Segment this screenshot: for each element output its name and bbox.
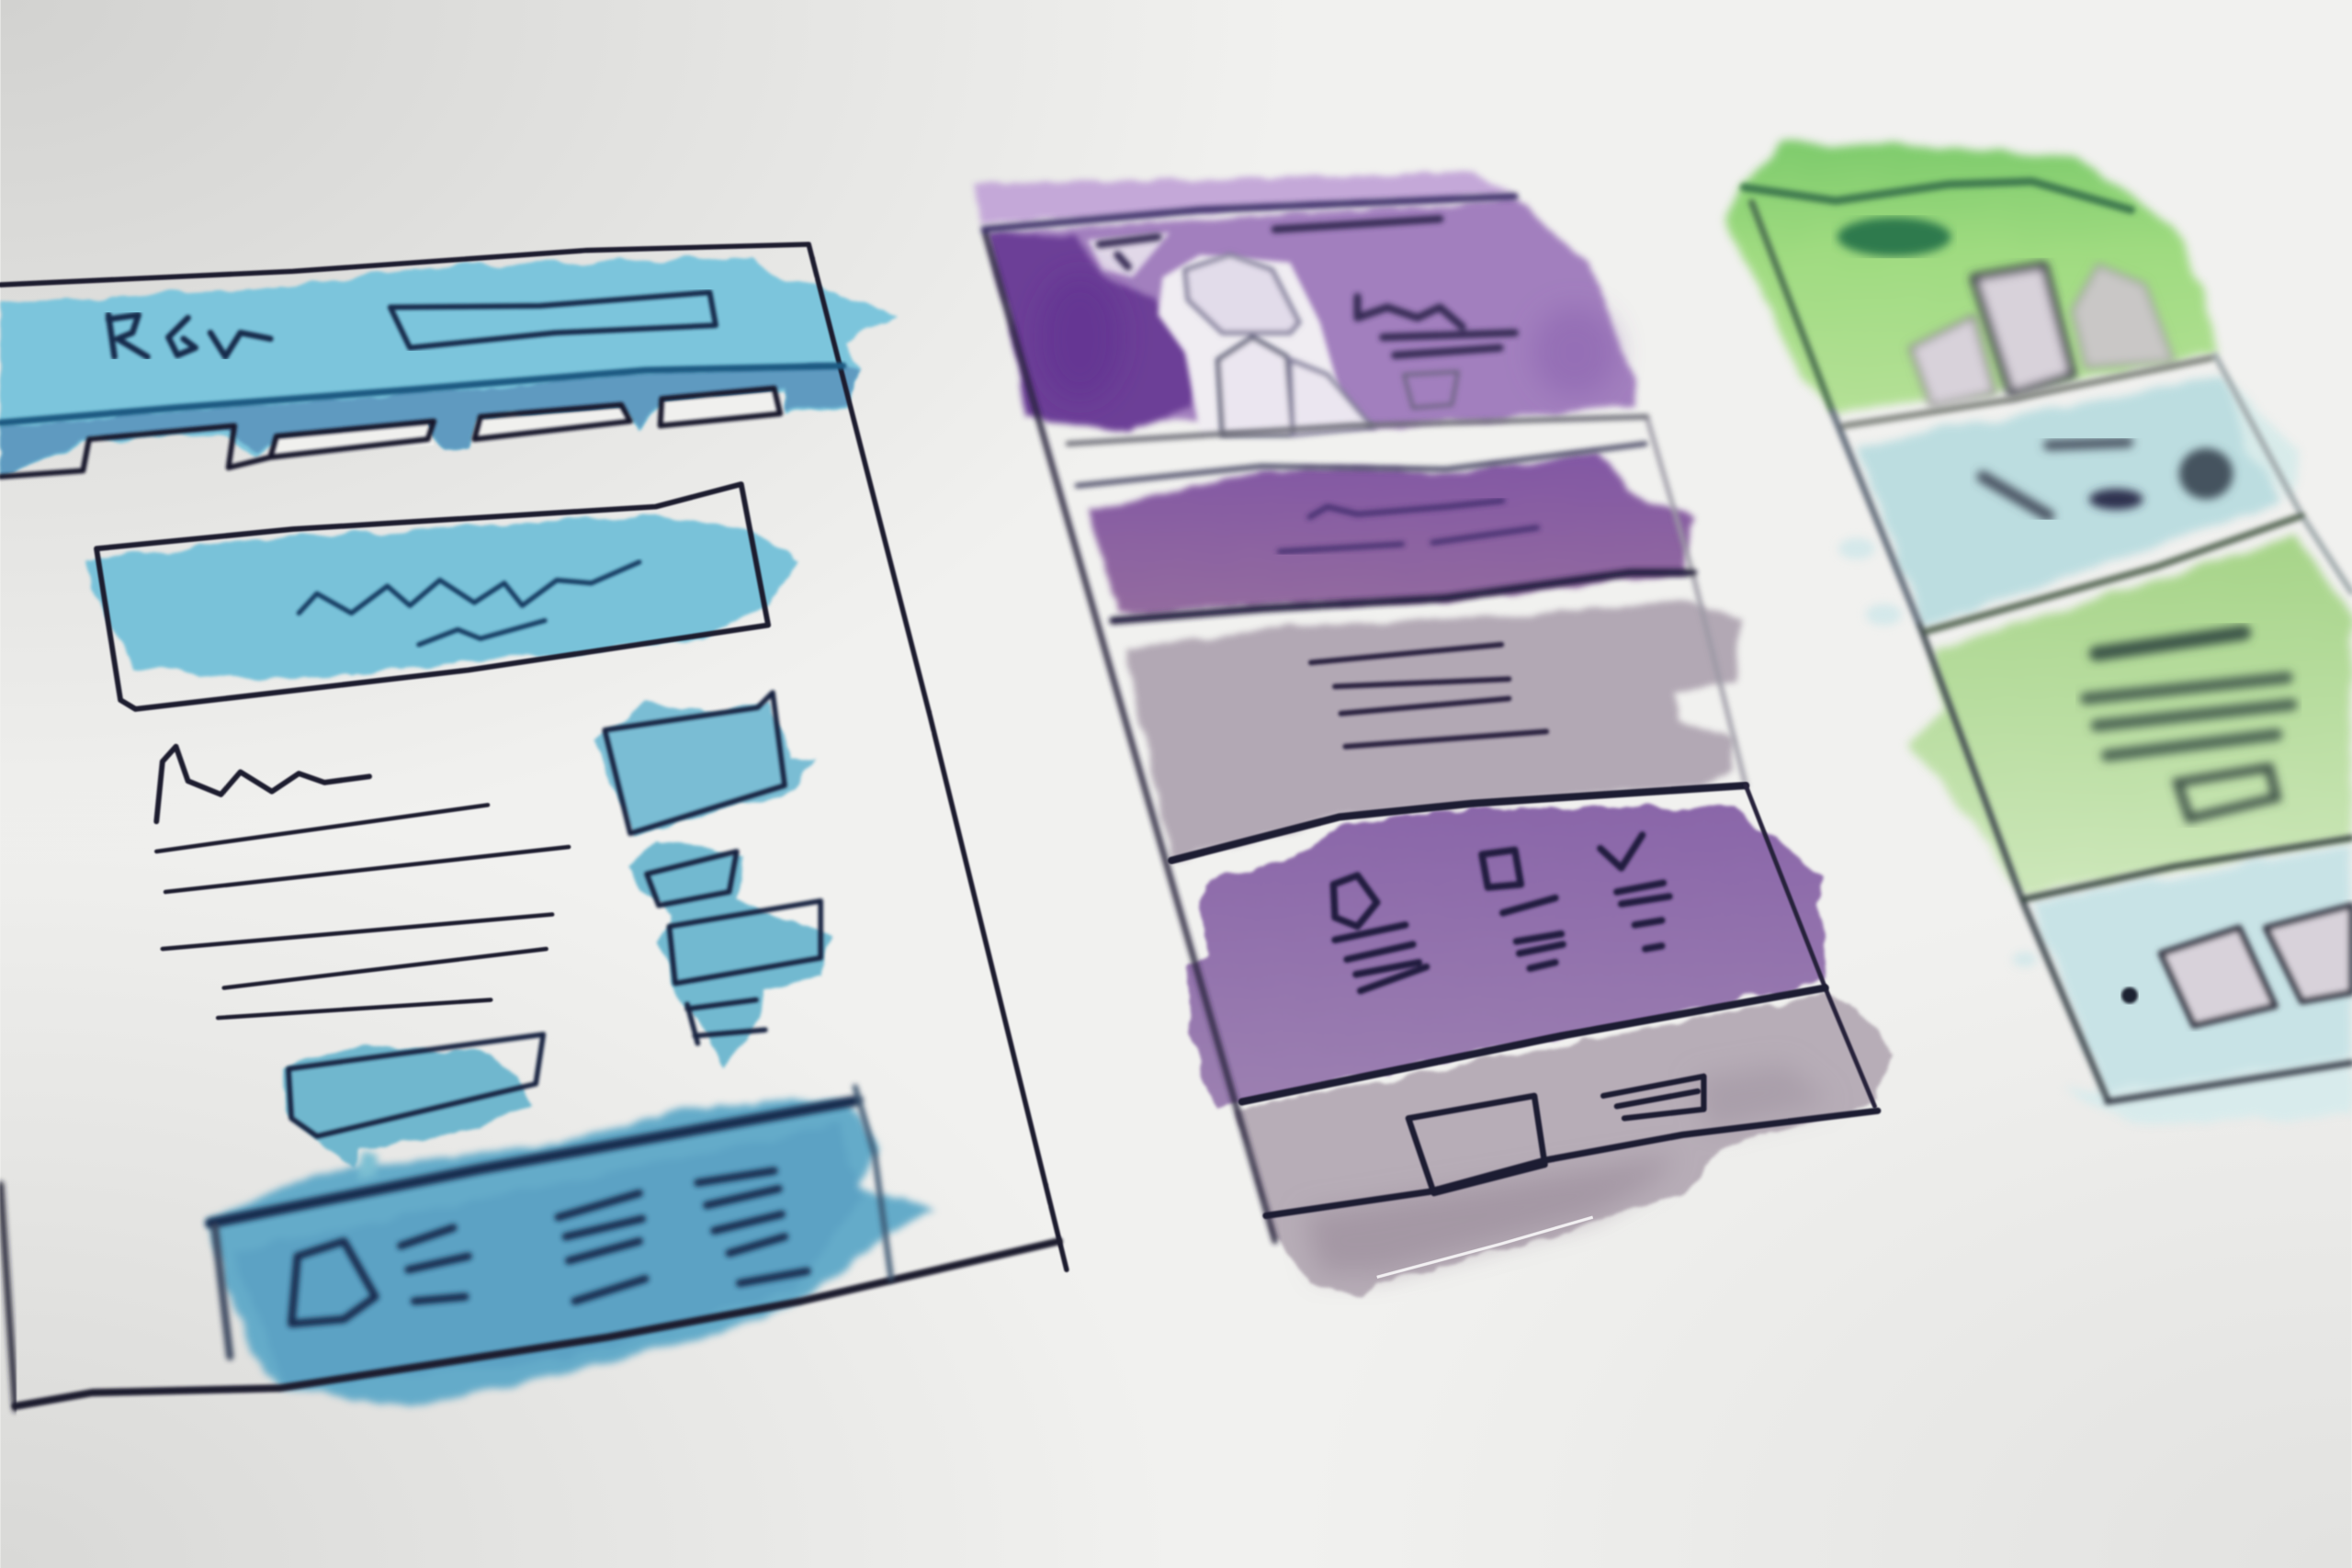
logo scribble	[108, 315, 270, 356]
panel: purple mobile wireframe	[974, 173, 1893, 1298]
text lines	[156, 805, 569, 1018]
washes: green and pale blue paint	[1728, 142, 2351, 1122]
outline: phone frame and sections	[1745, 181, 2351, 1101]
panel: blue desktop wireframe	[1, 244, 1067, 1409]
wash: darker purple corner shadow	[1038, 275, 1617, 400]
divider above lower purple	[1171, 785, 1746, 861]
hero squiggle	[299, 562, 639, 645]
washes: header and content blue paint	[1, 258, 897, 1169]
button	[288, 1034, 543, 1136]
green section text	[2086, 633, 2291, 818]
person illustration in hero	[1185, 254, 1373, 434]
grey section text lines	[1311, 645, 1546, 747]
footer dot	[2121, 987, 2138, 1004]
panel: green mobile wireframe	[1728, 142, 2351, 1122]
three column icons and lines	[1333, 835, 1669, 991]
upper frame and dividers	[984, 197, 1746, 1241]
pale dry-brush mark in footer wash	[1377, 1217, 1593, 1277]
white paper halo around person	[1088, 232, 1350, 434]
skyline illustration	[1911, 265, 2173, 406]
wash: blurred blue footer paint	[208, 1100, 936, 1406]
wash: grey footer shadow tone	[1305, 1065, 1830, 1274]
wash: darker blue nav band below header line	[1, 365, 861, 477]
footer thumbnails	[2161, 906, 2351, 1025]
outline: browser frame	[1, 244, 1067, 1409]
navigation bar lines	[1, 366, 843, 477]
hero header scribbles	[1100, 219, 1515, 408]
right lower frame	[1746, 785, 1874, 1106]
text heading scribble	[156, 747, 369, 821]
outline: phone frame and sections	[984, 197, 1878, 1241]
footer divider, button and lines	[1242, 987, 1878, 1215]
washes: top purple paint	[974, 173, 1741, 861]
band text lines	[1280, 501, 1537, 552]
search box	[390, 292, 716, 348]
washes: lower purple and grey paint	[1186, 807, 1893, 1298]
nav tab cut-outs	[270, 391, 780, 457]
side boxes	[605, 693, 820, 1043]
footer box	[210, 1087, 891, 1357]
faint blue bleed specks	[1838, 538, 2037, 967]
pale band icons	[1983, 442, 2233, 515]
frame bottom edge	[16, 1241, 1059, 1406]
frame top and right edges	[1, 244, 1067, 1409]
dark green header smudge	[1838, 218, 1951, 256]
hero box	[96, 484, 768, 709]
